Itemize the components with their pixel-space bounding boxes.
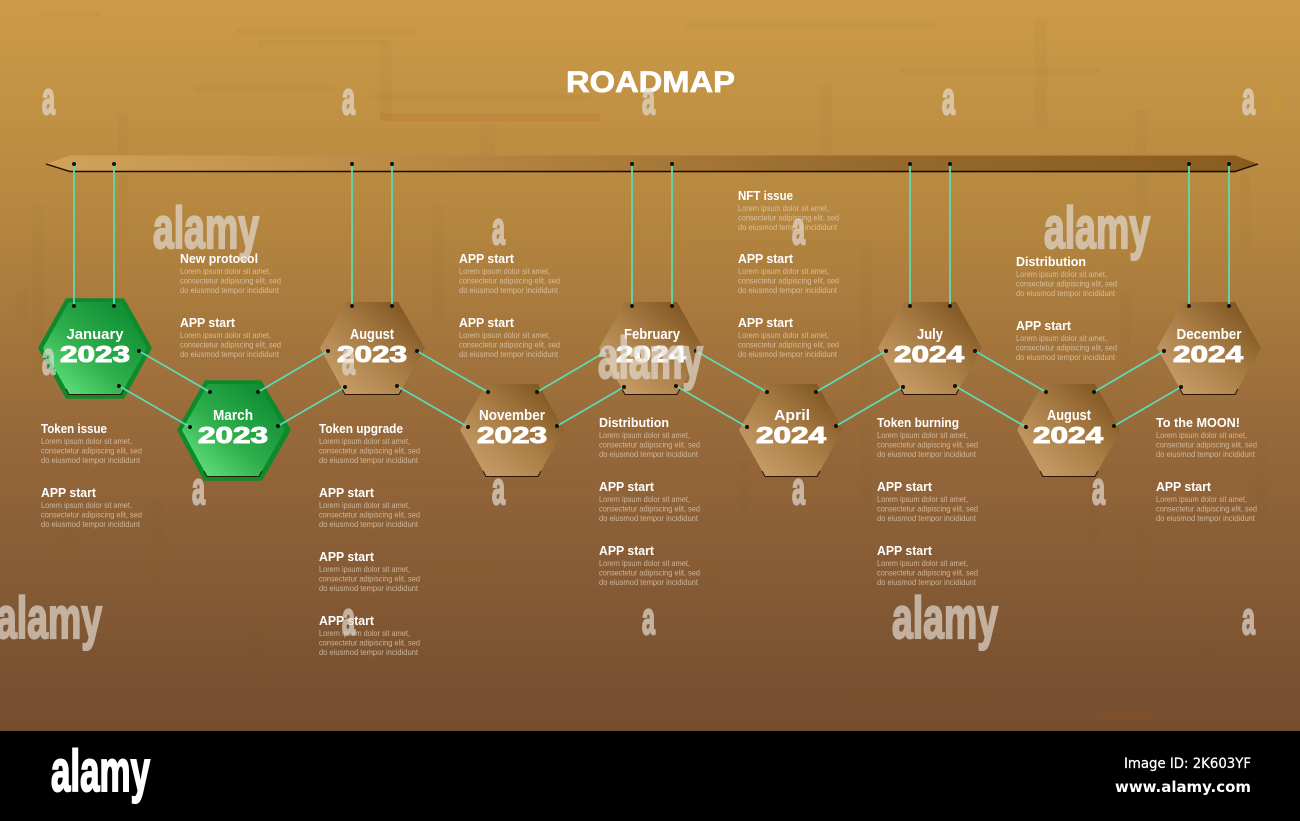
hanging strings [74, 164, 1229, 306]
watermarks: a [1242, 73, 1256, 124]
text: Token issue: Token issue [41, 421, 107, 436]
watermarks: a [942, 73, 956, 124]
text: APP start: Lorem ipsum dolor sit amet, [459, 330, 550, 340]
watermarks: a [492, 203, 506, 254]
text: APP start: APP start [459, 251, 515, 266]
text: Distribution: Distribution [1016, 254, 1086, 269]
timeline bar [46, 156, 1258, 172]
hexagon: December 2024: 2024 [1173, 341, 1243, 367]
text: APP start: do eiusmod tempor incididunt [877, 577, 977, 587]
text: APP start: consectetur adipiscing elit, sed [738, 276, 839, 286]
watermarks: a [792, 463, 806, 514]
watermarks: a [792, 203, 806, 254]
hexagon: November 2023 [460, 384, 564, 476]
hexagon: April 2024 [739, 384, 843, 476]
text: APP start [599, 543, 700, 587]
text: Token upgrade: consectetur adipiscing elit, sed [319, 446, 420, 456]
text: APP start: APP start [738, 315, 794, 330]
text: APP start: Lorem ipsum dolor sit amet, [459, 266, 550, 276]
hexagon: July 2024: 2024 [894, 341, 964, 367]
text: APP start: consectetur adipiscing elit, sed [319, 574, 420, 584]
text: Distribution: Distribution [599, 415, 669, 430]
hexagon: November 2023: 2023 [477, 422, 547, 448]
text: APP start: do eiusmod tempor incididunt [319, 583, 419, 593]
hexagon: March 2023: 2023 [198, 422, 268, 448]
text: Distribution: consectetur adipiscing elit, sed [1016, 278, 1117, 288]
text: New protocol: consectetur adipiscing elit, sed [180, 276, 281, 286]
text: To the MOON!: do eiusmod tempor incididunt [1156, 449, 1256, 459]
text: Distribution: consectetur adipiscing elit, sed [599, 440, 700, 450]
watermarks: alamy [0, 586, 102, 651]
text: APP start: do eiusmod tempor incididunt [319, 647, 419, 657]
text: APP start: consectetur adipiscing elit, sed [459, 276, 560, 286]
text: APP start: consectetur adipiscing elit, sed [319, 638, 420, 648]
text: Distribution: do eiusmod tempor incididunt [599, 449, 699, 459]
text: Token issue: do eiusmod tempor incididunt [41, 455, 141, 465]
hexagon: April 2024: 2024 [756, 422, 826, 448]
watermarks: a [642, 593, 656, 644]
hexagon: August 2024: 2024 [1033, 422, 1103, 448]
text: APP start: APP start [459, 315, 515, 330]
text: New protocol: Lorem ipsum dolor sit amet, [180, 266, 271, 276]
text: APP start: Lorem ipsum dolor sit amet, [180, 330, 271, 340]
text: APP start: APP start [319, 613, 375, 628]
text: Distribution: do eiusmod tempor incididunt [1016, 288, 1116, 298]
text: Token issue [41, 421, 142, 465]
text: APP start: do eiusmod tempor incididunt [877, 513, 977, 523]
text: APP start [738, 315, 839, 359]
footer strip [0, 731, 1300, 821]
text: APP start [877, 543, 978, 587]
watermarks: a [1092, 463, 1106, 514]
text: NFT issue: do eiusmod tempor incididunt [738, 222, 838, 232]
hexagon: April 2024: April [774, 407, 810, 424]
watermarks: alamy [892, 586, 998, 651]
title: ROADMAP [566, 66, 735, 99]
text: APP start: consectetur adipiscing elit, sed [877, 504, 978, 514]
hexagon: December 2024: December [1176, 326, 1242, 343]
text: APP start: APP start [599, 479, 655, 494]
watermarks: a [492, 463, 506, 514]
watermarks: a [342, 73, 356, 124]
text: APP start: APP start [877, 479, 933, 494]
hexagon: February 2024: 2024 [616, 341, 686, 367]
watermarks: a [42, 73, 56, 124]
text: NFT issue: consectetur adipiscing elit, sed [738, 212, 839, 222]
text: NFT issue [738, 188, 839, 232]
text: New protocol: New protocol [180, 251, 258, 266]
text: Token upgrade: Token upgrade [319, 421, 403, 436]
text: New protocol: do eiusmod tempor incididunt [180, 285, 280, 295]
text: APP start: APP start [180, 315, 236, 330]
hexagon: January 2023 [40, 300, 150, 397]
text: APP start: consectetur adipiscing elit, sed [1156, 504, 1257, 514]
text: Token upgrade: Lorem ipsum dolor sit amet, [319, 436, 410, 446]
watermarks: a [1242, 593, 1256, 644]
text: APP start: consectetur adipiscing elit, sed [41, 510, 142, 520]
text: APP start [1156, 479, 1257, 523]
text: APP start: APP start [877, 543, 933, 558]
watermarks [0, 73, 1256, 651]
text: To the MOON!: Lorem ipsum dolor sit amet, [1156, 430, 1247, 440]
text: Distribution: Lorem ipsum dolor sit amet, [599, 430, 690, 440]
footer strip: alamy [51, 739, 150, 804]
text: APP start: consectetur adipiscing elit, sed [877, 568, 978, 578]
text: Token issue: consectetur adipiscing elit, sed [41, 446, 142, 456]
hexagon: July 2024 [878, 302, 982, 394]
watermarks: alamy [153, 196, 259, 261]
text: APP start: Lorem ipsum dolor sit amet, [319, 500, 410, 510]
text: NFT issue: NFT issue [738, 188, 793, 203]
text: APP start: APP start [41, 485, 97, 500]
text: Distribution [1016, 254, 1117, 298]
text: APP start: consectetur adipiscing elit, sed [319, 510, 420, 520]
hexagon: August 2023 [320, 302, 425, 394]
hexagon: July 2024: July [917, 326, 944, 343]
text: APP start: do eiusmod tempor incididunt [41, 519, 141, 529]
hexagon: March 2023 [179, 382, 289, 479]
text: APP start: do eiusmod tempor incididunt [738, 285, 838, 295]
watermarks: a [42, 333, 56, 384]
text: APP start: do eiusmod tempor incididunt [459, 285, 559, 295]
text: APP start [738, 251, 839, 295]
text: APP start [459, 251, 560, 295]
hexagon: March 2023: March [213, 407, 253, 424]
text: NFT issue: Lorem ipsum dolor sit amet, [738, 203, 829, 213]
text: APP start: do eiusmod tempor incididunt [599, 577, 699, 587]
text: APP start: consectetur adipiscing elit, sed [599, 504, 700, 514]
text: APP start: Lorem ipsum dolor sit amet, [738, 330, 829, 340]
text: APP start: consectetur adipiscing elit, sed [459, 340, 560, 350]
watermarks: alamy [598, 326, 703, 391]
text: APP start [319, 549, 420, 593]
text: Distribution [599, 415, 700, 459]
text: APP start [41, 485, 142, 529]
watermarks: a [342, 333, 356, 384]
text: To the MOON!: To the MOON! [1156, 415, 1240, 430]
hexagon: August 2024 [1017, 384, 1121, 476]
text: Token burning: do eiusmod tempor incididunt [877, 449, 977, 459]
footer strip: Image ID: 2K603YF [1124, 756, 1251, 772]
watermarks: alamy [1044, 196, 1150, 261]
hexagon: January 2023: January [66, 326, 124, 343]
text: APP start: Lorem ipsum dolor sit amet, [738, 266, 829, 276]
text: To the MOON!: consectetur adipiscing elit, sed [1156, 440, 1257, 450]
text: Token upgrade: do eiusmod tempor incididunt [319, 455, 419, 465]
text: APP start: Lorem ipsum dolor sit amet, [599, 494, 690, 504]
text: APP start: Lorem ipsum dolor sit amet, [877, 494, 968, 504]
text: APP start: APP start [1156, 479, 1212, 494]
text: APP start: Lorem ipsum dolor sit amet, [599, 558, 690, 568]
text: APP start: do eiusmod tempor incididunt [180, 349, 280, 359]
text: APP start [459, 315, 560, 359]
text: Token issue: Lorem ipsum dolor sit amet, [41, 436, 132, 446]
text: APP start: APP start [738, 251, 794, 266]
watermarks: a [642, 73, 656, 124]
watermarks: a [192, 463, 206, 514]
text: Token burning: Lorem ipsum dolor sit amet, [877, 430, 968, 440]
text: APP start: do eiusmod tempor incididunt [1156, 513, 1256, 523]
text: APP start: APP start [1016, 318, 1072, 333]
text: APP start: Lorem ipsum dolor sit amet, [877, 558, 968, 568]
connector links [119, 351, 1181, 427]
hexagon: August 2024: August [1047, 407, 1091, 424]
watermarks: a [342, 593, 356, 644]
text: Token burning [877, 415, 978, 459]
footer strip: www.alamy.com [1115, 778, 1251, 796]
text: Distribution: Lorem ipsum dolor sit amet, [1016, 269, 1107, 279]
text: APP start: do eiusmod tempor incididunt [599, 513, 699, 523]
text: APP start: consectetur adipiscing elit, sed [1016, 342, 1117, 352]
text: APP start: Lorem ipsum dolor sit amet, [1016, 333, 1107, 343]
text: APP start: APP start [319, 485, 375, 500]
hexagon: January 2023: 2023 [60, 341, 130, 367]
text: APP start: consectetur adipiscing elit, sed [599, 568, 700, 578]
hexagon: December 2024 [1157, 302, 1261, 394]
text: Token burning: Token burning [877, 415, 959, 430]
text: APP start: do eiusmod tempor incididunt [738, 349, 838, 359]
text: APP start: consectetur adipiscing elit, sed [180, 340, 281, 350]
text: APP start: APP start [319, 549, 375, 564]
text: APP start: do eiusmod tempor incididunt [1016, 352, 1116, 362]
text: APP start: Lorem ipsum dolor sit amet, [41, 500, 132, 510]
hexagon: August 2023: 2023 [337, 341, 407, 367]
text: APP start [319, 485, 420, 529]
text: APP start: do eiusmod tempor incididunt [459, 349, 559, 359]
text: APP start: Lorem ipsum dolor sit amet, [319, 628, 410, 638]
rivets [72, 162, 1231, 429]
text: APP start [877, 479, 978, 523]
text: New protocol [180, 251, 281, 295]
text: APP start [180, 315, 281, 359]
text: APP start: consectetur adipiscing elit, sed [738, 340, 839, 350]
text: APP start: Lorem ipsum dolor sit amet, [319, 564, 410, 574]
hexagon: August 2023: August [350, 326, 394, 343]
text: APP start [599, 479, 700, 523]
text: APP start: Lorem ipsum dolor sit amet, [1156, 494, 1247, 504]
hexagon: February 2024 [599, 302, 703, 394]
text: Token burning: consectetur adipiscing elit, sed [877, 440, 978, 450]
text: To the MOON! [1156, 415, 1257, 459]
text: Token upgrade [319, 421, 420, 465]
text: APP start: do eiusmod tempor incididunt [319, 519, 419, 529]
text: APP start [319, 613, 420, 657]
hexagon: February 2024: February [624, 326, 681, 343]
text: APP start [1016, 318, 1117, 362]
hexagon: November 2023: November [479, 407, 545, 424]
text: APP start: APP start [599, 543, 655, 558]
